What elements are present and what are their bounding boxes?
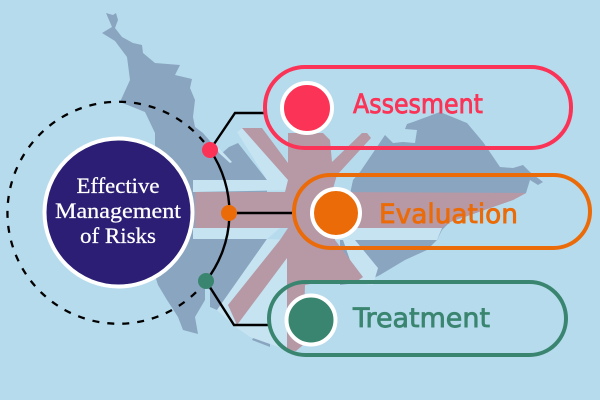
east island — [340, 112, 543, 285]
label: assessment: Assesment — [353, 89, 483, 120]
flag red cross — [195, 128, 526, 351]
label: evaluation: Evaluation — [379, 199, 518, 230]
label: treatment: Treatment — [352, 303, 490, 334]
panel: evaluation — [294, 175, 590, 248]
panel: treatment — [269, 282, 566, 355]
map with flag overlay — [102, 13, 543, 351]
west island — [102, 13, 267, 334]
icon: treatment circle — [286, 296, 336, 344]
icon: assessment circle — [282, 83, 332, 133]
connector: evaluation — [229, 212, 292, 214]
panel: assessment — [265, 67, 571, 148]
connector: treatment — [206, 281, 268, 325]
icon: evaluation circle — [312, 189, 360, 237]
dashed ring — [7, 102, 210, 324]
node: assessment — [202, 142, 218, 158]
connector: assessment — [210, 113, 265, 150]
node: evaluation — [221, 205, 237, 221]
central title: Management — [55, 198, 181, 223]
flag light stripes — [193, 128, 442, 350]
central title: Effective — [76, 173, 160, 198]
central circle — [44, 138, 192, 286]
central title: of Risks — [80, 223, 156, 248]
node: treatment — [198, 273, 214, 289]
solid arc — [206, 150, 229, 281]
bottom map fragment — [252, 318, 270, 347]
